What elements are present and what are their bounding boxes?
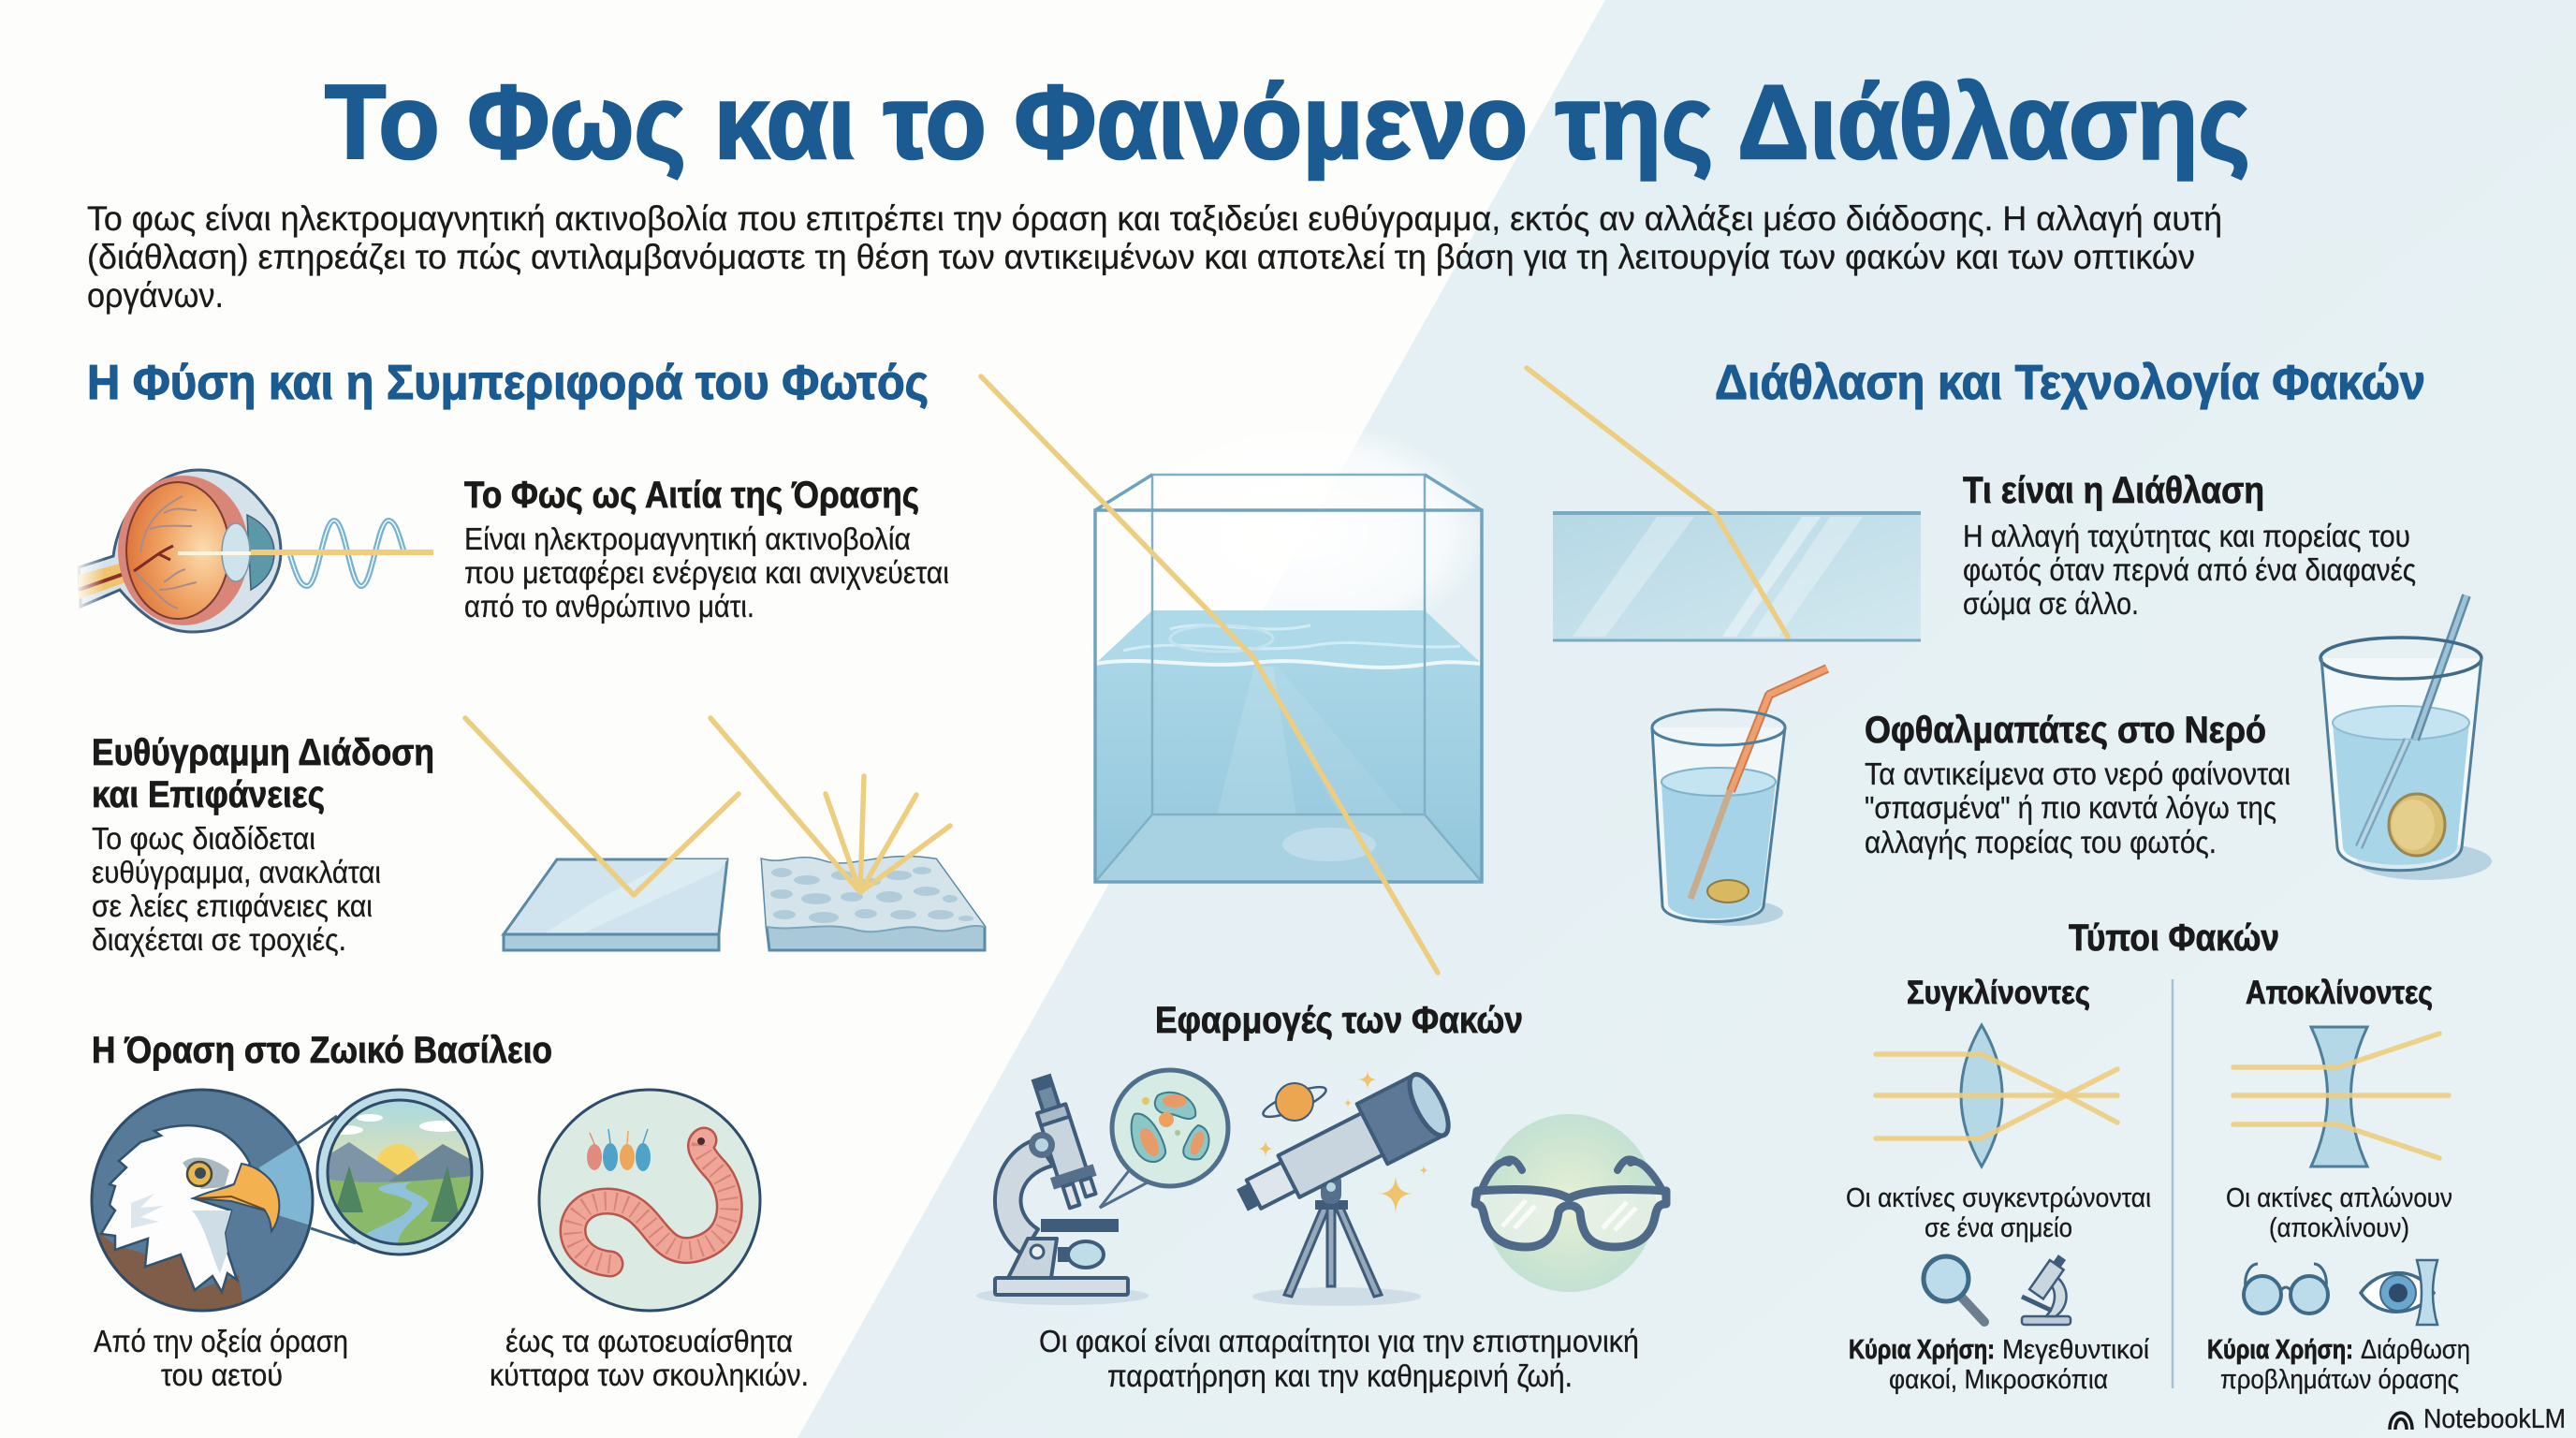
smooth surface reflection: [465, 718, 739, 950]
intro text block: (διάθλαση) επηρεάζει το πώς αντιλαμβανόμαστε τη θέση των αντικειμένων και αποτελεί τη βάση για τη λειτουργία των φακών και των οπτικών: [87, 238, 2195, 276]
glass block with ray: [1527, 368, 1921, 640]
icon: eyeglasses: [1475, 1114, 1666, 1292]
icon: glass with bent straw: [1652, 668, 1827, 926]
description: σε ένα σημείο: [1925, 1213, 2072, 1243]
body text: σώμα σε άλλο.: [1963, 586, 2139, 621]
body text: αλλαγής πορείας του φωτός.: [1865, 825, 2217, 859]
NotebookLM logo: NotebookLM: [2423, 1404, 2566, 1434]
column: diverging: [2207, 975, 2470, 1395]
body text: ευθύγραμμα, ανακλάται: [92, 855, 381, 889]
main use: φακοί, Μικροσκόπια: [1889, 1365, 2108, 1395]
description: Οι ακτίνες απλώνουν: [2226, 1183, 2452, 1213]
caption: worm: [490, 1324, 809, 1392]
caption: eagle: [94, 1324, 348, 1392]
icon: glass with straw and coin: [2320, 595, 2492, 880]
icon: telescope: [1227, 1069, 1456, 1306]
intro text block: οργάνων.: [87, 276, 224, 315]
description: [1846, 1183, 2151, 1243]
sub-heading: Αποκλίνοντες: [2246, 975, 2433, 1011]
icon: microscope: [976, 1070, 1149, 1305]
main use: προβλημάτων όρασης: [2220, 1365, 2459, 1395]
heading: Τύποι Φακών: [2069, 917, 2279, 959]
main use: Μεγεθυντικοί: [2002, 1335, 2150, 1365]
main use: [1849, 1335, 2150, 1395]
body text: Η αλλαγή ταχύτητας και πορείας του: [1963, 519, 2410, 553]
icon: round glasses: [2244, 1264, 2328, 1313]
main use: [2207, 1335, 2470, 1395]
icon: eye with corrective lens: [2361, 1260, 2437, 1325]
caption: παρατήρηση και την καθημερινή ζωή.: [1107, 1358, 1573, 1393]
caption: worm: κύτταρα των σκουληκιών.: [490, 1357, 809, 1392]
body text: Τα αντικείμενα στο νερό φαίνονται: [1865, 756, 2291, 791]
heading: Τι είναι η Διάθλαση: [1963, 470, 2264, 511]
icon: eye anatomy with light wave: [75, 470, 433, 632]
main use: Κύρια Χρήση:: [1849, 1335, 1995, 1365]
panel: lens applications: [976, 1000, 1666, 1393]
icon: magnified cells bubble: [1100, 1070, 1228, 1208]
center illustration: water tank with refracted ray: [981, 376, 1488, 973]
main use: Κύρια Χρήση:: [2207, 1335, 2353, 1365]
body text: διαχέεται σε τροχιές.: [92, 922, 346, 957]
heading: Εφαρμογές των Φακών: [1155, 1000, 1523, 1041]
body text: φωτός όταν περνά από ένα διαφανές: [1963, 552, 2416, 587]
light ray: [981, 376, 1438, 973]
heading: Το Φως ως Αιτία της Όρασης: [464, 475, 919, 516]
title: Το Φως και το Φαινόμενο της Διάθλασης: [325, 64, 2250, 181]
body text: [1865, 756, 2291, 859]
intro text block: Το φως είναι ηλεκτρομαγνητική ακτινοβολία που επιτρέπει την όραση και ταξιδεύει ευθύγραμμα, εκτός αν αλλάξει μέσο διάδοσης. Η αλλαγή αυτή: [87, 199, 2222, 238]
heading: Ευθύγραμμη Διάδοση: [92, 732, 434, 773]
icon: landscape lens: [317, 1090, 482, 1255]
icon: worm: [539, 1090, 760, 1311]
panel: what is refraction: [1527, 368, 2416, 640]
sub-heading: Συγκλίνοντες: [1907, 975, 2090, 1011]
description: Οι ακτίνες συγκεντρώνονται: [1846, 1183, 2151, 1213]
description: (αποκλίνουν): [2269, 1213, 2409, 1243]
body text: "σπασμένα" ή πιο καντά λόγω της: [1865, 790, 2276, 825]
icon: eagle: [92, 1090, 318, 1320]
diverging lens diagram: [2233, 1027, 2449, 1167]
body text: Το φως διαδίδεται: [92, 821, 315, 856]
panel: vision in the animal kingdom: [92, 1030, 809, 1392]
heading: nature of light: Η Φύση και η Συμπεριφορά του Φωτός: [87, 356, 929, 410]
heading: Η Όραση στο Ζωικό Βασίλειο: [92, 1030, 552, 1071]
body text: [92, 821, 381, 957]
heading: και Επιφάνειες: [92, 774, 325, 815]
converging lens diagram: [1876, 1025, 2117, 1167]
body text: που μεταφέρει ενέργεια και ανιχνεύεται: [464, 555, 949, 590]
panel: lens types: [1846, 917, 2470, 1395]
panel: straight propagation and surfaces: [92, 718, 985, 957]
rough surface diffuse reflection: [710, 718, 985, 950]
panel: light as the cause of vision: [75, 470, 949, 632]
caption: eagle: Από την οξεία όραση: [94, 1324, 348, 1358]
caption: Οι φακοί είναι απαραίτητοι για την επιστημονική: [1039, 1324, 1639, 1358]
heading: refraction and lenses: Διάθλαση και Τεχνολογία Φακών: [1715, 356, 2425, 410]
connector lines: [297, 1116, 356, 1243]
description: [2226, 1183, 2452, 1243]
caption: eagle: του αετού: [161, 1357, 283, 1392]
body text: [1963, 519, 2416, 621]
intro text block: [87, 199, 2222, 315]
body text: από το ανθρώπινο μάτι.: [464, 589, 754, 624]
heading: [92, 732, 434, 815]
body text: σε λείες επιφάνειες και: [92, 888, 373, 923]
icon: magnifying glass: [1924, 1256, 1984, 1322]
main use: Διάρθωση: [2361, 1335, 2470, 1365]
panel: illusions in water: [1652, 595, 2492, 926]
column: converging: [1846, 975, 2151, 1395]
icon: small microscope: [2022, 1253, 2071, 1325]
body text: Είναι ηλεκτρομαγνητική ακτινοβολία: [464, 521, 911, 556]
body text: [464, 521, 949, 624]
caption: [1039, 1324, 1639, 1393]
heading: Οφθαλμαπάτες στο Νερό: [1865, 710, 2266, 751]
caption: worm: έως τα φωτοευαίσθητα: [505, 1324, 793, 1358]
